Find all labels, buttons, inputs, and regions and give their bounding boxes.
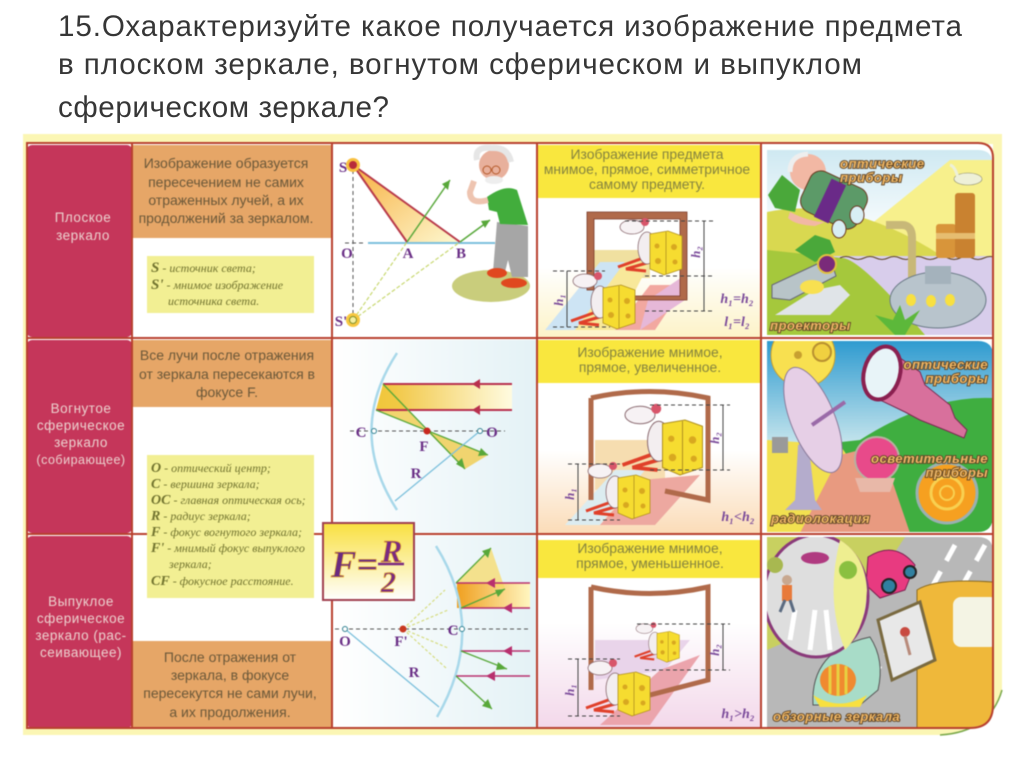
panel: image descriptions — [538, 145, 761, 728]
illustration: flat mirror mouse: h₁ — [551, 294, 566, 306]
text: convex mirror explanation: После отражения от — [164, 649, 297, 665]
diagram: convex mirror: R — [409, 665, 420, 681]
label: concave mirror: Вогнутое — [51, 401, 111, 416]
label: concave mirror: сферическое — [37, 418, 125, 433]
icon: moon — [770, 340, 836, 384]
text: flat mirror explanation — [132, 145, 332, 238]
formula box: R — [380, 533, 402, 569]
panel: optical devices picture — [767, 150, 996, 336]
label: convex mirror — [27, 536, 132, 728]
text: convex mirror explanation: а их продолжения. — [169, 704, 291, 720]
label: concave mirror: зеркало — [54, 435, 108, 450]
legend: optics terms — [147, 455, 314, 598]
text: concave mirror explanation: Все лучи после отражения — [140, 347, 314, 363]
illustration: concave mirror mouse: h₁<h₂ — [721, 510, 755, 525]
illustration: concave mirror mouse: h₁ — [562, 488, 577, 500]
poster — [23, 134, 1002, 735]
diagram: flat mirror: S — [339, 160, 347, 176]
heading: concave mirror image: Изображение мнимое, — [577, 344, 723, 360]
label: optical devices: приборы — [840, 170, 903, 185]
diagram: flat mirror: S' — [335, 314, 347, 330]
text: convex mirror explanation: зеркала, в фокусе — [171, 667, 289, 683]
text: flat mirror explanation: отраженных лучей, а их — [148, 192, 304, 208]
label: optical devices — [904, 357, 988, 386]
title — [58, 10, 963, 124]
panel: rear view mirrors picture — [764, 535, 998, 729]
diagram: concave mirror — [333, 340, 537, 533]
illustration: concave mirror mouse — [538, 383, 761, 533]
illustration: flat mirror mouse: l₁=l₂ — [724, 315, 750, 330]
text: flat mirror explanation: продолжений за зеркалом. — [139, 210, 313, 226]
label: optical devices: оптические — [904, 357, 988, 372]
text: flat mirror explanation: пересечением не самих — [148, 174, 304, 190]
icon: grass — [875, 305, 920, 335]
heading: concave mirror image — [538, 340, 761, 383]
diagram: concave mirror: C — [356, 425, 366, 441]
diagram: concave mirror: R — [411, 466, 422, 482]
heading: concave mirror image: прямое, увеличенное. — [579, 359, 721, 375]
text: convex mirror explanation: пересекутся не сами лучи, — [143, 685, 317, 701]
diagram: flat mirror: B — [456, 246, 466, 262]
panel: row labels — [27, 145, 132, 728]
legend: optics terms: F' - мнимый фокус выпуклого — [150, 541, 305, 556]
text: concave mirror explanation — [132, 340, 332, 407]
label: flat mirror: Плоское — [55, 210, 111, 225]
legend: optics terms: зеркала; — [168, 557, 212, 571]
heading: convex mirror image: прямое, уменьшенное. — [576, 555, 724, 571]
label: convex mirror: сферическое — [37, 611, 125, 626]
heading: flat mirror image: самому предмету. — [589, 176, 705, 192]
icon: pink car — [866, 550, 916, 598]
label: convex mirror: зеркало (рас- — [35, 628, 127, 643]
icon: posts and goose — [936, 165, 982, 258]
legend: flat mirror: источника света. — [168, 294, 259, 308]
diagram: flat mirror: A — [403, 246, 414, 262]
illustration: convex mirror mouse: h₂ — [707, 644, 722, 656]
legend: optics terms: O - оптический центр; — [151, 461, 271, 476]
formula box — [323, 523, 414, 600]
text: concave mirror explanation: от зеркала пересекаются в — [139, 366, 315, 382]
label: optical devices: приборы — [925, 371, 988, 386]
icon: radar dish — [772, 366, 846, 511]
illustration: concave mirror mouse: h₂ — [707, 432, 722, 444]
icon: projector — [772, 255, 850, 315]
label: radar: радиолокация — [770, 511, 870, 526]
diagram: concave mirror: O — [486, 425, 498, 441]
diagram: convex mirror: O — [339, 634, 351, 650]
label: lighting devices — [871, 451, 988, 480]
diagram: convex mirror: F' — [394, 634, 408, 650]
text: convex mirror explanation — [132, 641, 332, 728]
label: projectors: проекторы — [770, 318, 851, 333]
panel: radar and lighting picture — [767, 323, 993, 533]
label: concave mirror — [27, 340, 132, 533]
legend: flat mirror: S - источник света; — [151, 260, 256, 276]
diagram: flat mirror: O — [341, 246, 353, 262]
diagram: concave mirror: F — [419, 439, 429, 455]
icon: telescope — [858, 342, 967, 438]
text: flat mirror explanation: Изображение образуется — [144, 155, 308, 171]
icon: orange lamp — [917, 463, 977, 523]
heading: convex mirror image — [538, 540, 761, 578]
text: concave mirror explanation: фокусе F. — [196, 384, 258, 400]
icon: old man with glasses — [452, 148, 530, 302]
icon: pink lamp — [855, 437, 899, 492]
title: в плоском зеркале, вогнутом сферическом и выпуклом — [58, 48, 862, 81]
heading: flat mirror image: мнимое, прямое, симметричное — [544, 161, 750, 177]
formula box: 2 — [380, 566, 396, 599]
label: convex mirror: Выпуклое — [48, 594, 114, 609]
legend: optics terms: CF - фокусное расстояние. — [151, 574, 294, 589]
icon: round road mirror — [764, 535, 868, 657]
legend: flat mirror: S' - мнимое изображение — [151, 277, 284, 293]
illustration: flat mirror mouse: h₂ — [688, 246, 703, 258]
illustration: flat mirror mouse — [538, 198, 761, 337]
heading: flat mirror image: Изображение предмета — [571, 146, 724, 162]
label: concave mirror: (собирающее) — [36, 453, 126, 467]
label: optical devices — [840, 156, 924, 185]
icon: bus — [917, 581, 998, 728]
diagram: flat mirror — [333, 145, 537, 337]
label: review mirrors: обзорные зеркала — [773, 709, 900, 724]
icon: rear view mirror — [878, 602, 935, 680]
legend: optics terms: R - радиус зеркала; — [150, 509, 251, 524]
icon: submarine with periscope — [886, 225, 986, 328]
illustration: flat mirror mouse: h₁=h₂ — [720, 292, 754, 307]
panel: explanations — [132, 145, 332, 728]
label: flat mirror — [27, 145, 132, 337]
diagram: convex mirror: C — [448, 623, 458, 639]
title: 15.Охарактеризуйте какое получается изображение предмета — [58, 10, 963, 43]
label: lighting devices: осветительные — [871, 451, 988, 466]
legend: optics terms: F - фокус вогнутого зеркала; — [150, 525, 302, 540]
label: convex mirror: сеивающее) — [40, 645, 122, 660]
icon: green car — [813, 637, 880, 707]
table frame — [27, 143, 993, 728]
title: сферическом зеркале? — [58, 91, 389, 124]
label: optical devices: оптические — [840, 156, 924, 171]
legend: flat mirror — [147, 256, 314, 313]
label: lighting devices: приборы — [925, 465, 988, 480]
formula box: F= — [330, 544, 378, 586]
illustration: convex mirror mouse: h₁ — [562, 684, 577, 696]
illustration: convex mirror mouse: h₁>h₂ — [721, 707, 755, 722]
heading: convex mirror image: Изображение мнимое, — [577, 540, 723, 556]
label: flat mirror: зеркало — [56, 228, 110, 243]
icon: man with binoculars — [768, 154, 871, 262]
diagram: convex mirror — [333, 536, 537, 728]
illustration: convex mirror mouse — [538, 578, 761, 728]
legend: optics terms: C - вершина зеркала; — [151, 477, 260, 492]
legend: optics terms: OC - главная оптическая ось; — [151, 493, 306, 508]
heading: flat mirror image — [538, 145, 761, 198]
